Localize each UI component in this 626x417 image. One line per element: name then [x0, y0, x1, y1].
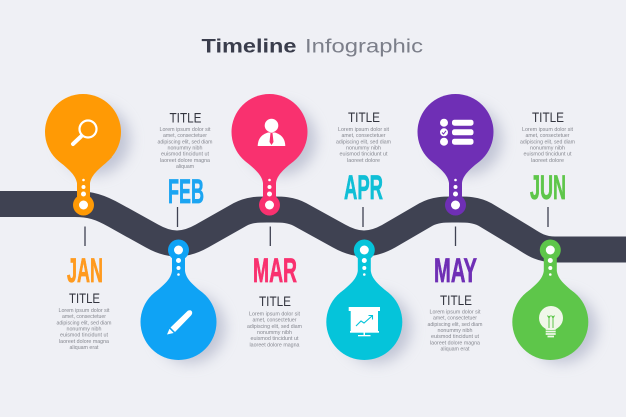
block: February: Lorem ipsum dolor sit — [160, 127, 211, 133]
block: February: nonummy nibh — [168, 146, 203, 152]
block: March: TITLE — [259, 294, 291, 309]
block: April: TITLE — [348, 110, 380, 125]
block: April: laoreet dolore — [347, 158, 380, 164]
block: February: TITLE — [170, 110, 202, 126]
icon: presentation board — [349, 307, 380, 336]
block: April: euismod tincidunt ut — [340, 152, 388, 158]
block: April: amet, consectetuer — [342, 133, 386, 139]
icon: light bulb — [539, 306, 563, 336]
block: January: adipiscing elit, sed diam — [56, 320, 112, 326]
title — [202, 37, 423, 58]
pin: February blue — [140, 240, 216, 360]
block: April: nonummy nibh — [346, 146, 381, 152]
block: May: amet, consectetuer — [433, 316, 477, 322]
block: May: aliquam erat — [440, 346, 470, 352]
tick marks — [85, 207, 548, 246]
pin: April cyan — [326, 240, 402, 360]
block: June: adipiscing elit, sed diam — [520, 139, 576, 145]
timeline road — [0, 204, 626, 250]
block: June: laoreet dolore — [531, 158, 564, 164]
block: March: nonummy nibh — [257, 330, 292, 336]
block: January: nonummy nibh — [66, 326, 102, 332]
block: June: nonummy nibh — [530, 146, 565, 152]
block: March: MAR — [253, 252, 297, 290]
block: April: Lorem ipsum dolor sit — [338, 127, 390, 133]
pin shadows — [60, 105, 597, 363]
block: June: euismod tincidunt ut — [524, 152, 572, 158]
icon: businessman — [258, 119, 285, 146]
block: January: TITLE — [69, 291, 100, 306]
block: February: euismod tincidunt ut — [161, 152, 210, 158]
block: March — [247, 252, 303, 348]
block: June — [520, 110, 576, 207]
block: April: adipiscing elit, sed diam — [336, 139, 392, 145]
block: May: nonummy nibh — [438, 328, 473, 334]
block: February: laoreet dolore magna — [160, 158, 210, 164]
block: March: amet, consectetuer — [252, 318, 297, 324]
block: January: amet, consectetuer — [62, 314, 106, 320]
block: February: adipiscing elit, sed diam — [158, 139, 213, 145]
icon: checklist — [440, 119, 474, 146]
block: February: amet, consectetuer — [163, 133, 207, 139]
block: March: laoreet dolore magna — [250, 342, 300, 348]
pin: June green — [512, 240, 588, 360]
block: January: Lorem ipsum dolor sit — [58, 308, 110, 314]
block: January: euismod tincidunt ut — [60, 333, 109, 339]
block: January: laoreet dolore magna — [59, 339, 109, 345]
block: January: JAN — [67, 252, 103, 290]
title: Timeline — [202, 37, 296, 58]
block: May: TITLE — [440, 293, 472, 308]
block: January — [56, 252, 112, 351]
block: March: adipiscing elit, sed diam — [247, 324, 303, 330]
block: February: aliquam — [176, 164, 195, 170]
block: April: APR — [344, 169, 383, 207]
block: January: aliquam erat — [70, 345, 99, 351]
icon: magnifier — [73, 120, 96, 144]
block: May: MAY — [434, 252, 477, 290]
block: March: Lorem ipsum dolor sit — [249, 312, 301, 318]
pin: March pink — [232, 94, 308, 216]
block: May: euismod tincidunt ut — [431, 334, 480, 340]
block: May: laoreet dolore magna — [430, 340, 480, 346]
block: May: adipiscing elit, sed diam — [428, 322, 483, 328]
title: Infographic — [305, 37, 423, 58]
block: June: amet, consectetuer — [526, 133, 570, 139]
block: June: JUN — [530, 169, 566, 207]
pin: January orange — [45, 94, 121, 216]
block: March: euismod tincidunt ut — [250, 336, 299, 342]
block: May: Lorem ipsum dolor sit — [430, 310, 481, 316]
block: May — [428, 252, 483, 352]
block: February: FEB — [168, 173, 204, 211]
block: June: TITLE — [532, 110, 564, 125]
block: February — [158, 110, 213, 211]
block: June: Lorem ipsum dolor sit — [522, 127, 574, 133]
icon: pencil — [167, 310, 192, 334]
block: April — [336, 110, 392, 207]
pin: May purple — [418, 94, 494, 216]
